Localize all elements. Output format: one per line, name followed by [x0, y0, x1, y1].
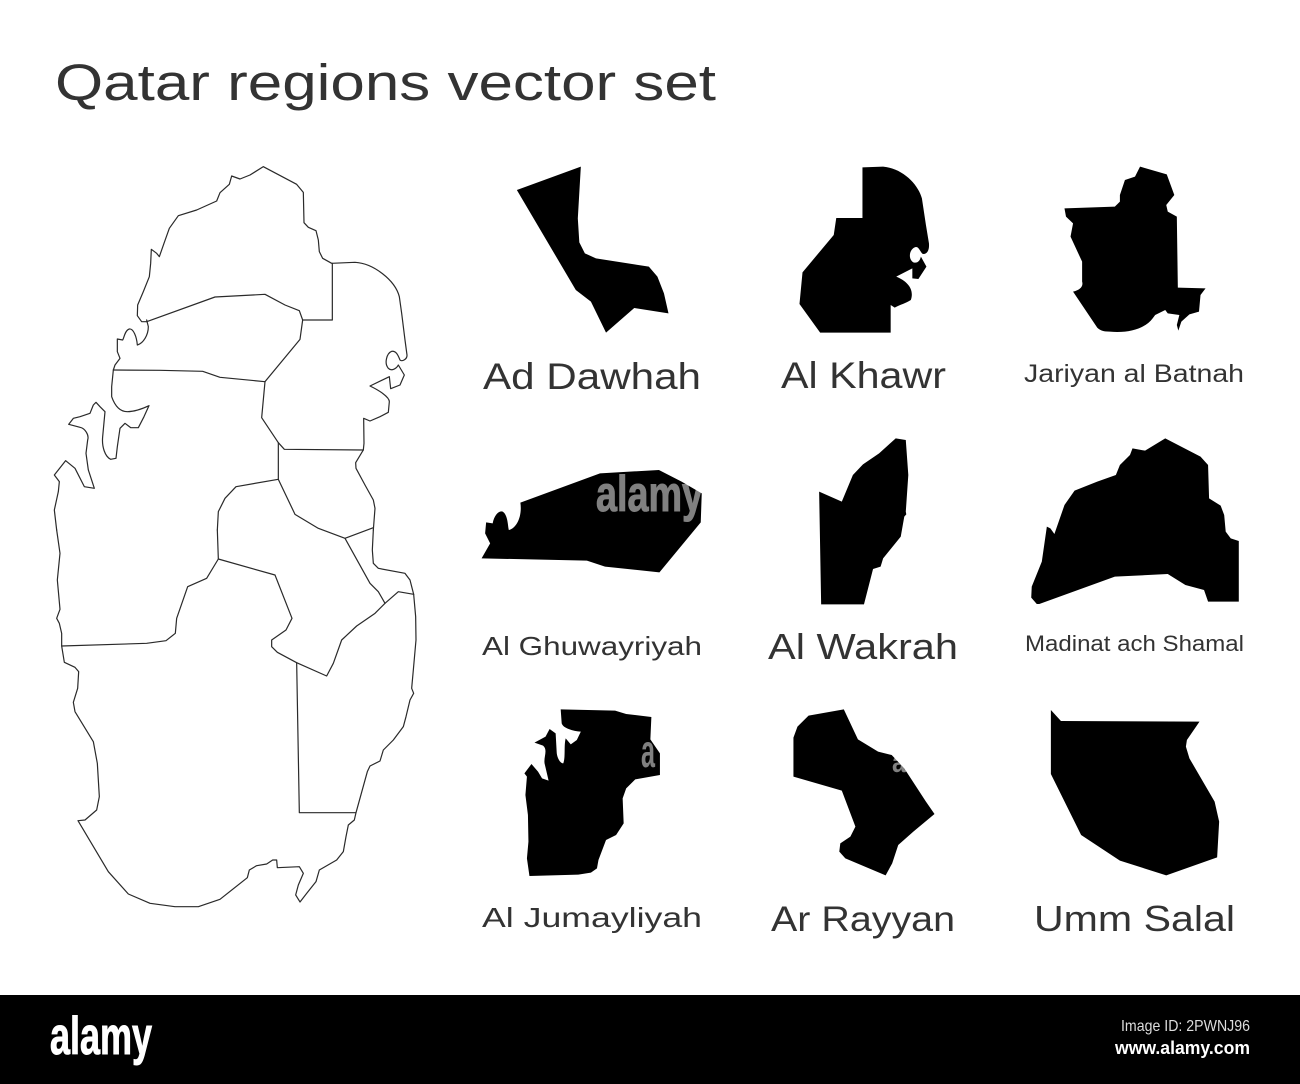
shape: Ar Rayyan: [793, 709, 935, 875]
shape: Al Wakrah: [819, 438, 908, 604]
label: Al Jumayliyah: Al Jumayliyah: [482, 902, 702, 933]
panel: Al Khawr: [781, 167, 946, 396]
label: Jariyan al Batnah: Jariyan al Batnah: [1024, 360, 1244, 388]
label: Umm Salal: Umm Salal: [1034, 898, 1235, 939]
shape: Al Khawr: [799, 167, 929, 333]
watermark: alamy over the shapes: [596, 466, 906, 779]
map: Qatar outline with regions: [54, 167, 416, 907]
map: southern half: [57, 530, 416, 907]
watermark: alamy over the shapes: alamy: [596, 466, 703, 522]
footer logo: alamy: alamy: [50, 1007, 152, 1066]
panel: Al Wakrah: [768, 438, 958, 667]
panel: Umm Salal: [1034, 710, 1235, 939]
label: Ad Dawhah: Ad Dawhah: [483, 356, 701, 397]
label: Al Wakrah: Al Wakrah: [768, 626, 958, 667]
label: Ar Rayyan: Ar Rayyan: [771, 900, 955, 939]
panel: Al Ghuwayriyah: [482, 470, 702, 661]
footer bar: [0, 995, 1300, 1084]
panel: Jariyan al Batnah: [1024, 167, 1244, 388]
panel: Ad Dawhah: [483, 167, 701, 397]
shape: Umm Salal: [1051, 710, 1219, 875]
label: Madinat ach Shamal: Madinat ach Shamal: [1025, 631, 1244, 656]
shape: Al Jumayliyah: [524, 709, 660, 876]
map: northern half: [54, 167, 407, 538]
footer image id: Image ID: 2PWNJ96: [1121, 1018, 1250, 1035]
title: Qatar regions vector set: [55, 54, 716, 111]
shape: Al Ghuwayriyah: [482, 470, 702, 572]
footer url: www.alamy.com: [1114, 1038, 1250, 1058]
panel: Ar Rayyan: [771, 709, 955, 939]
shape: Jariyan al Batnah: [1064, 167, 1206, 332]
watermark: alamy over the shapes: a: [892, 746, 906, 779]
label: Al Khawr: Al Khawr: [781, 355, 946, 396]
panel: Madinat ach Shamal: [1025, 438, 1244, 656]
watermark: alamy over the shapes: a: [641, 725, 655, 777]
shape: Ad Dawhah: [517, 167, 668, 333]
shape: Madinat ach Shamal: [1031, 438, 1239, 604]
panel: Al Jumayliyah: [482, 709, 702, 933]
label: Al Ghuwayriyah: Al Ghuwayriyah: [482, 631, 702, 661]
